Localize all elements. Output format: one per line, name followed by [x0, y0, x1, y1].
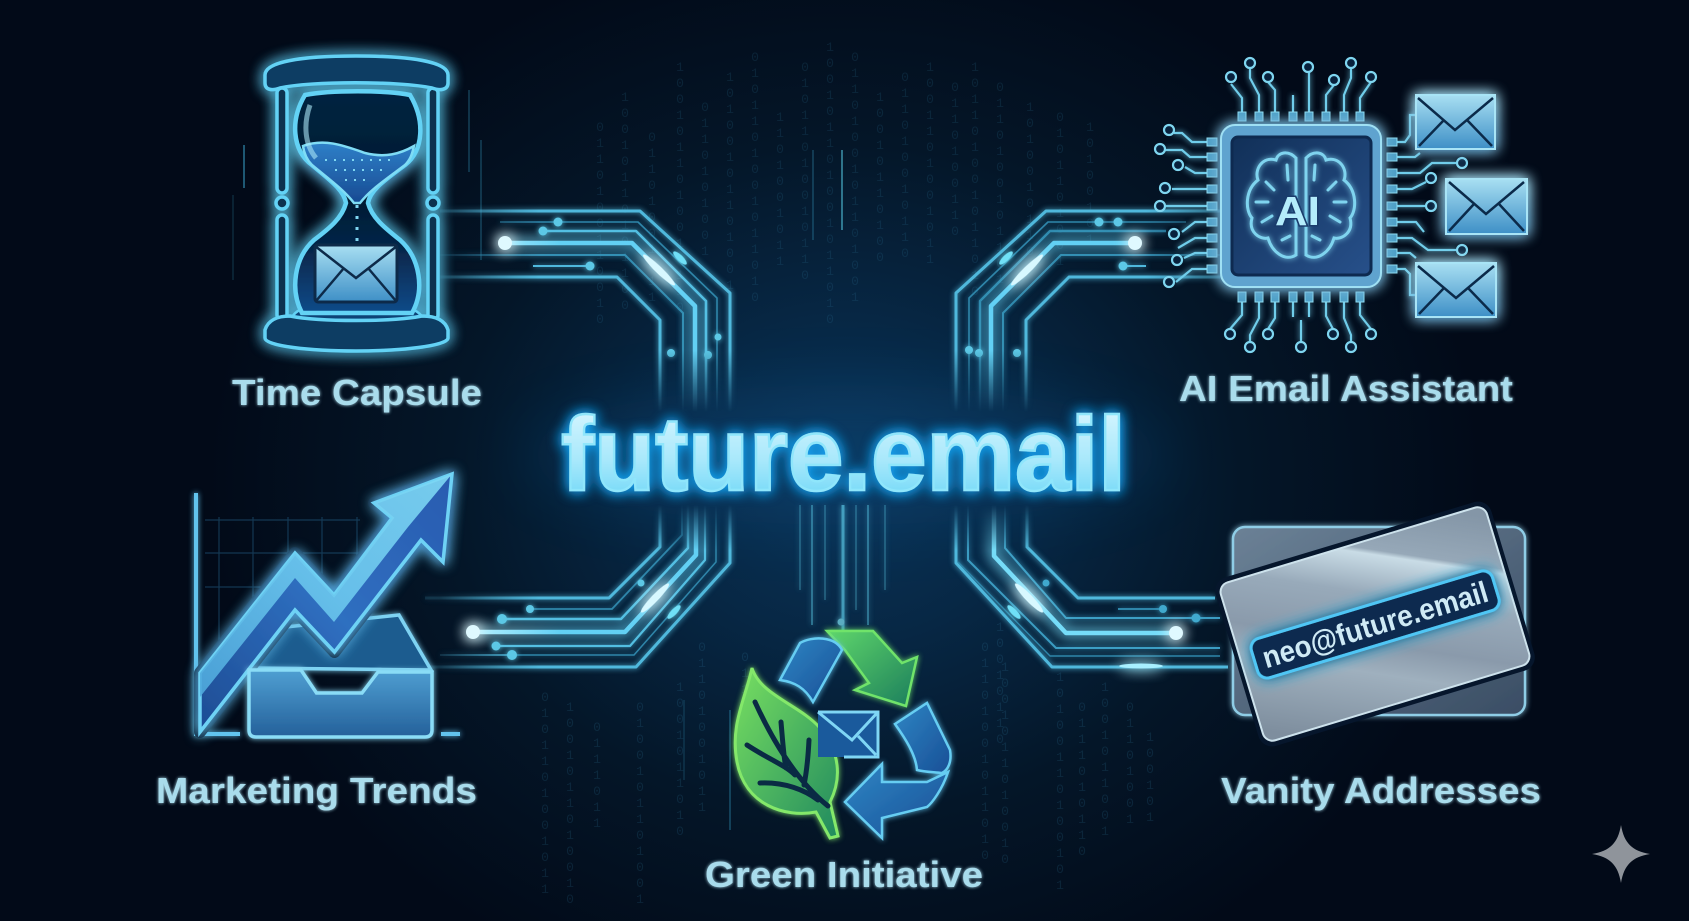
binary code rain: 1001011001	[1098, 680, 1112, 840]
AI text: AI	[1275, 188, 1320, 234]
binary code rain: 01101001011	[694, 640, 710, 816]
envelopes	[1416, 95, 1527, 317]
chip traces	[1165, 68, 1457, 342]
binary code rain: 100101	[1142, 730, 1158, 826]
binary code rain: 101101001011010	[968, 60, 982, 300]
hourglass sand	[303, 143, 414, 203]
binary code rain: 1001011010	[672, 680, 688, 840]
tray back	[249, 615, 431, 670]
icon: vanity address card	[1212, 498, 1538, 750]
address pill: neo@future.email	[1259, 576, 1492, 675]
binary code rain: 1001101001011	[922, 60, 938, 268]
binary code rain: 1001011010010	[998, 660, 1012, 868]
leaf veins	[747, 702, 828, 806]
tray front	[249, 670, 432, 737]
icon: recycling leaf	[735, 631, 951, 838]
trend arrow highlight	[200, 474, 452, 697]
chip pins	[1207, 112, 1397, 302]
binary code rain: 1010010110	[1022, 100, 1038, 260]
chart grid	[205, 517, 360, 700]
leaf	[735, 668, 838, 838]
hourglass sand speckle	[325, 160, 395, 180]
binary code rain: 0101101001011	[538, 690, 552, 898]
label: Green Initiative: Green Initiative	[705, 854, 983, 895]
binary code rain: 011010010110	[898, 70, 912, 262]
label: Marketing Trends: Marketing Trends	[156, 770, 477, 811]
back card	[1233, 527, 1525, 715]
label: Vanity Addresses: Vanity Addresses	[1221, 770, 1541, 811]
recycling blue segments	[780, 638, 951, 838]
trend arrow outline	[200, 474, 452, 732]
hourglass highlight	[306, 105, 316, 158]
binary code rain: 100101101001011010	[822, 40, 838, 328]
binary code rain: 10010110	[992, 620, 1008, 748]
trend arrow	[200, 474, 452, 732]
label: AI Email Assistant: AI Email Assistant	[1179, 368, 1513, 409]
binary code rain: 0110100101101001	[848, 50, 862, 306]
binary code rain: 10010110100	[872, 90, 888, 266]
binary code rain	[233, 40, 1158, 908]
icon: hourglass time capsule	[265, 56, 448, 351]
binary code rain: 01101001011	[644, 130, 660, 306]
icon: AI chip with envelopes	[1155, 58, 1527, 352]
binary code rain: 0110101001	[698, 100, 712, 260]
circuit traces: bottom right	[956, 505, 1228, 668]
chip nodes	[1155, 58, 1467, 352]
binary code rain: 0100101101001	[632, 700, 648, 908]
binary code rain: 1001011010010110	[672, 60, 688, 316]
binary code rain: 0110100110010	[592, 120, 608, 328]
binary code rain: 10100101	[1082, 120, 1098, 248]
hourglass glass	[295, 91, 420, 313]
binary code rain: 0101101001	[1052, 110, 1068, 270]
hourglass top plate	[265, 56, 448, 90]
hourglass envelope	[315, 245, 397, 302]
binary code rain: 10100101101001	[722, 70, 738, 294]
binary code rain: 0111010110	[1074, 700, 1090, 860]
binary code rain: 01101001	[1122, 700, 1138, 828]
hourglass frame columns	[276, 88, 439, 320]
circuit traces: centre vertical connectors	[800, 505, 885, 632]
binary code rain: 01011010010110	[798, 60, 812, 284]
title: future.email	[561, 396, 1126, 513]
hourglass bottom plate	[265, 316, 448, 351]
hourglass falling grains	[356, 205, 358, 245]
recycling envelope	[818, 712, 878, 757]
glow behind title	[525, 385, 1165, 525]
binary code rain: 0110100110	[948, 80, 962, 240]
circuit traces: top right	[956, 211, 1246, 412]
binary code rain: 1101001011	[772, 110, 788, 270]
binary code rain: 10100110100101	[1052, 670, 1068, 894]
binary code rain: 0111011	[590, 720, 604, 832]
brain	[1247, 153, 1355, 257]
binary code rain: 10010110101100	[618, 90, 632, 314]
circuit traces: top left	[440, 211, 730, 412]
front card	[1212, 498, 1538, 750]
hourglass pedestal	[291, 303, 424, 320]
chip body	[1221, 125, 1381, 287]
chip inner panel	[1232, 137, 1371, 275]
icon: marketing trends chart	[196, 474, 460, 737]
binary code rain: 0110101	[738, 650, 752, 762]
binary code rain: 1001011010010	[562, 700, 578, 908]
icon: sparkle watermark	[1592, 825, 1650, 883]
binary code rain: 0110100101101	[992, 80, 1008, 288]
chart axes	[196, 493, 460, 734]
label: Time Capsule: Time Capsule	[232, 372, 482, 413]
recycling green arrow	[827, 631, 917, 706]
circuit traces: bottom left	[425, 505, 730, 667]
binary code rain: 0101101001011010	[748, 50, 762, 306]
binary code rain: 01101001011010	[978, 640, 992, 864]
